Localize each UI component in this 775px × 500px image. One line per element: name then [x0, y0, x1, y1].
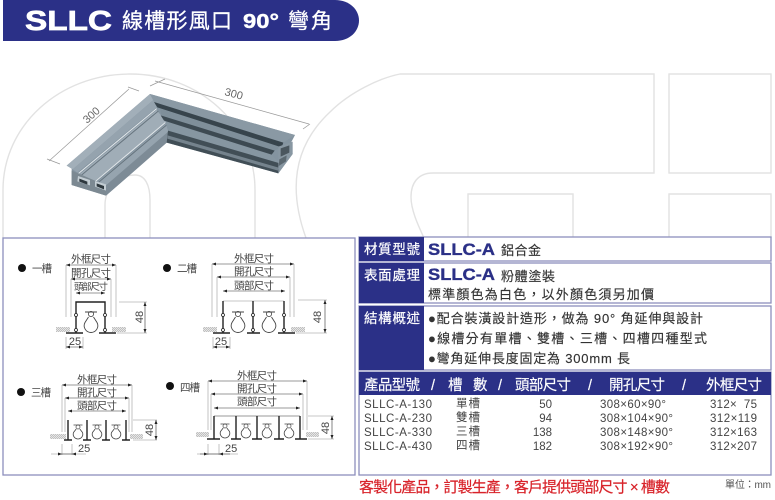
product illustration: 90 degree aluminium corner: 300: [223, 86, 244, 103]
table rows: SLLC-A-330: [364, 427, 432, 439]
diagram: double slot: 48: [312, 311, 324, 323]
panel: material: 鋁合金: [501, 243, 541, 258]
diagram: single slot: 一槽: [32, 263, 52, 275]
table rows: 雙槽: [456, 411, 480, 424]
diagram: triple slot: 開孔尺寸: [77, 386, 117, 399]
diagram: double slot: 外框尺寸: [234, 252, 274, 265]
table rows: 312×207: [710, 441, 757, 453]
diagram: double slot: 二槽: [177, 263, 198, 275]
panel: structure overview: ●彎角延伸長度固定為 300mm 長: [428, 351, 630, 366]
diagram: double slot: 開孔尺寸: [234, 265, 274, 278]
diagram: double slot: [163, 252, 327, 349]
diagram: triple slot: 頭部尺寸: [77, 399, 117, 412]
title banner: [3, 0, 359, 41]
diagram: triple slot: 外框尺寸: [77, 373, 117, 386]
left arm inner side: [106, 132, 168, 196]
dimension lines: [47, 79, 310, 164]
panel: structure overview: ●線槽分有單槽、雙槽、三槽、四槽四種型式: [428, 331, 707, 346]
background outline logo pattern: [3, 74, 771, 238]
table rows: 四槽: [456, 439, 480, 452]
diagram: double slot: 25: [215, 336, 227, 348]
silhouette: [67, 94, 295, 196]
diagram: quadruple slot: 外框尺寸: [237, 369, 277, 382]
table rows: 308×104×90°: [600, 413, 673, 425]
table header: /: [498, 378, 503, 394]
diagram: single slot: 25: [69, 336, 81, 348]
left end face: [72, 171, 106, 196]
panel: structure overview: 結構概述: [364, 311, 420, 326]
right end face: [278, 142, 293, 173]
table rows: SLLC-A-130: [364, 399, 432, 411]
panel: surface treatment: 表面處理: [364, 268, 420, 283]
diagram: quadruple slot: 四槽: [180, 382, 200, 394]
title banner: 90°: [243, 11, 279, 33]
table header: 頭部尺寸: [515, 377, 571, 394]
diagram: quadruple slot: 開孔尺寸: [237, 382, 277, 395]
diagram: single slot: 頭部尺寸: [74, 281, 108, 293]
diagram: single slot: 外框尺寸: [71, 252, 111, 266]
table: product sizes: [359, 372, 771, 475]
diagram: single slot: 開孔尺寸: [71, 266, 111, 280]
table rows: 182: [533, 441, 552, 453]
diagram: quadruple slot: [166, 369, 334, 456]
panel: surface treatment: SLLC-A: [428, 266, 495, 284]
table rows: SLLC-A-430: [364, 441, 432, 453]
panel: material: [359, 237, 771, 261]
diagram: double slot: 頭部尺寸: [234, 279, 274, 292]
diagram: triple slot: [17, 373, 158, 456]
table rows: 312× 75: [710, 399, 757, 411]
table header: 產品型號: [364, 377, 420, 394]
table rows: 138: [533, 427, 552, 439]
note: unit: 單位：mm: [725, 478, 771, 491]
table header: 開孔尺寸: [609, 377, 665, 394]
table rows: 308×148×90°: [600, 427, 673, 439]
panel: surface treatment: 粉體塗裝: [501, 269, 555, 284]
panel: structure overview: ●配合裝潢設計造形，做為 90° 角延伸與設計: [428, 311, 703, 326]
note: custom order statement: 客製化產品，訂製生產，客戶提供頭部尺寸 × 槽數: [359, 479, 670, 496]
table rows: [364, 397, 757, 453]
table header: [364, 377, 762, 394]
diagram: triple slot: 三槽: [31, 387, 52, 399]
diagram: quadruple slot: 頭部尺寸: [237, 395, 277, 408]
table rows: SLLC-A-230: [364, 413, 432, 425]
diagram: quadruple slot: 25: [225, 443, 237, 455]
table rows: 50: [539, 399, 552, 411]
left arm top surfaces: [67, 94, 153, 169]
table rows: 三槽: [456, 425, 480, 438]
table rows: 308×60×90°: [600, 399, 666, 411]
panel: surface treatment: [359, 263, 771, 303]
table rows: 312×119: [710, 413, 757, 425]
panel: material: 材質型號: [364, 242, 420, 257]
right arm slots: [154, 102, 283, 147]
table rows: 308×192×90°: [600, 441, 673, 453]
table header: 數: [473, 377, 488, 394]
diagram: triple slot: 25: [78, 443, 90, 455]
product illustration: 90 degree aluminium corner: 300: [81, 105, 103, 126]
table rows: 94: [539, 413, 553, 425]
diagram: single slot: 48: [134, 311, 146, 323]
table rows: 單槽: [456, 397, 480, 410]
panel: surface treatment: 標準顏色為白色，以外顏色須另加價: [428, 287, 654, 302]
table rows: 312×163: [710, 427, 757, 439]
table header: /: [588, 378, 593, 394]
table header: 外框尺寸: [706, 377, 762, 394]
diagram: triple slot: 48: [144, 424, 156, 436]
diagram: single slot: [18, 252, 147, 349]
title banner: SLLC: [25, 5, 112, 36]
title banner: 彎角: [288, 10, 332, 33]
product illustration: 90 degree aluminium corner: [47, 79, 310, 196]
panel: structure overview: [359, 306, 771, 370]
left arm groove lines: [79, 109, 157, 173]
right arm top surfaces: [150, 94, 295, 143]
table header: 槽: [448, 377, 462, 394]
table header: /: [682, 378, 687, 394]
panel: slot cross-section drawings: [3, 238, 355, 475]
panel: material: SLLC-A: [428, 241, 495, 259]
title banner: 線槽形風口: [122, 10, 232, 33]
diagram: quadruple slot: 48: [320, 422, 332, 434]
table header: /: [431, 378, 436, 394]
